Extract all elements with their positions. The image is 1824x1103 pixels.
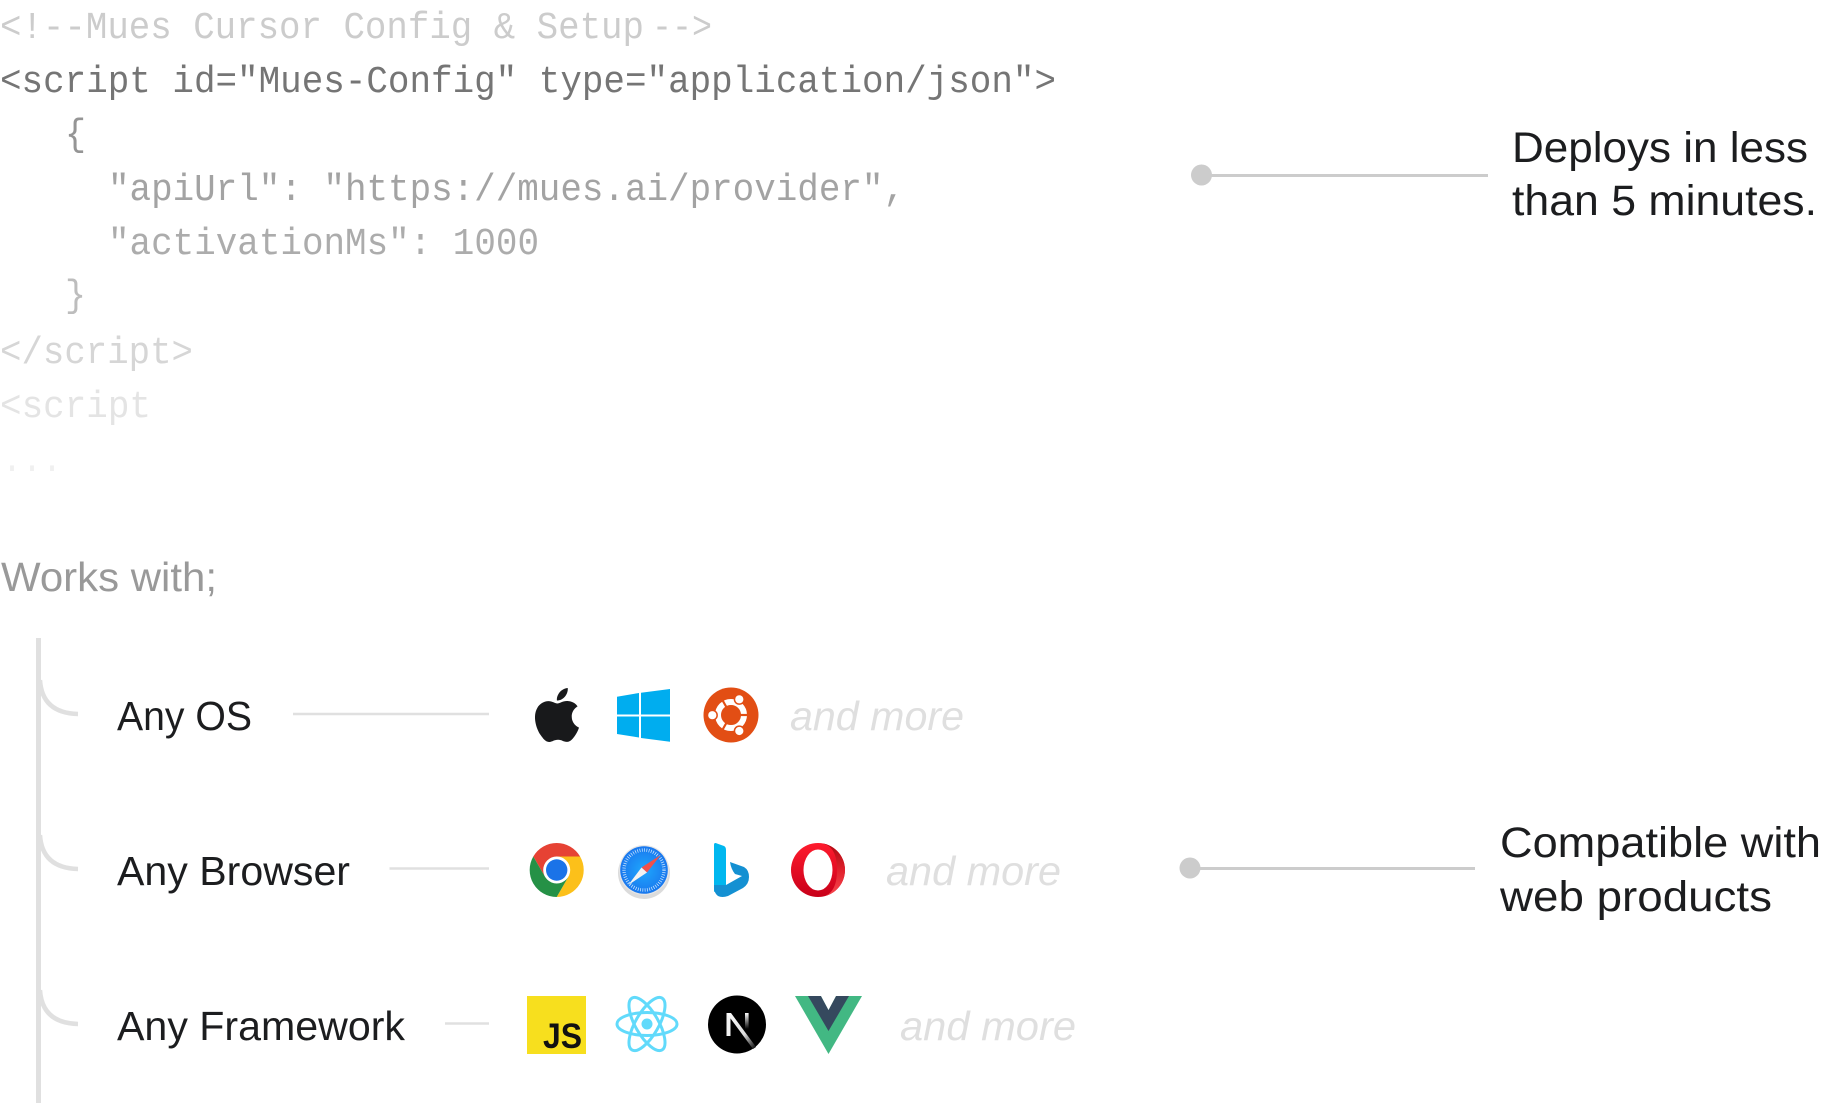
row: any framework [117,992,1076,1056]
code block: cursor config snippet: "activationMs": 1000 [108,223,539,266]
icon: safari [618,845,670,899]
icon: opera [791,843,845,897]
callout: compatible with web products: Compatible with [1500,819,1821,867]
icon: nextjs [708,996,766,1054]
callout: deploys in less than 5 minutes: Deploys in less [1512,124,1808,172]
callout: compatible with web products: web products [1499,873,1772,921]
code block: cursor config snippet: --> [652,7,712,50]
callout: deploys in less than 5 minutes: than 5 minutes. [1512,177,1817,225]
code block: cursor config snippet: </script> [0,332,193,375]
icon: react [617,992,677,1056]
row: any browser: and more [886,848,1061,894]
icon: vue [795,996,862,1054]
callout: deploys in less than 5 minutes [1191,124,1817,225]
heading: works with: Works with; [1,554,217,600]
code block: cursor config snippet: ... [2,440,62,483]
row: any framework: Any Framework [117,1003,405,1049]
icon: apple [535,688,579,742]
row: any OS: Any OS [117,693,252,739]
icon: bing [714,843,749,897]
row: any browser: Any Browser [117,848,350,894]
code block: cursor config snippet: } [65,275,86,318]
row: any OS: and more [790,693,964,739]
icon: windows [617,689,670,742]
tree connector [38,638,78,1103]
callout: compatible with web products [1180,819,1821,921]
code block: cursor config snippet: <!--Mues Cursor Config & Setup [0,7,644,50]
row: any framework: and more [900,1003,1076,1049]
row: any OS [117,688,964,742]
row: any browser [117,843,1061,899]
icon: javascript [527,996,586,1056]
icon: chrome [530,843,584,897]
code block: cursor config snippet: <script id="Mues-Config" type="application/json"> [0,61,1056,104]
code block: cursor config snippet: "apiUrl": "https://mues.ai/provider", [108,169,905,212]
icon: javascript: JS [543,1017,582,1056]
code block: cursor config snippet: { [65,114,86,157]
icon: ubuntu [704,688,758,742]
code block: cursor config snippet: <script [0,386,151,429]
code block: cursor config snippet [0,7,1056,483]
